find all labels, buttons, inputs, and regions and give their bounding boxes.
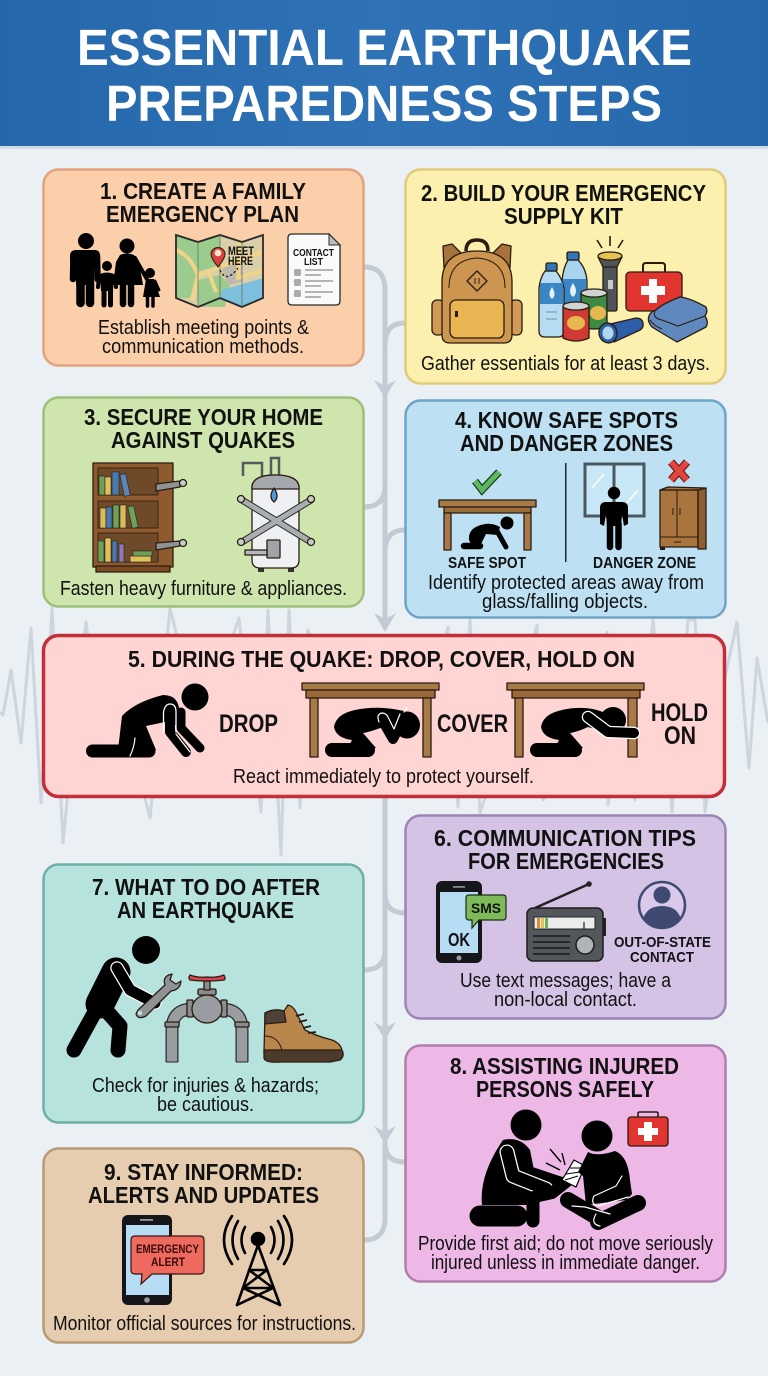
label: out-of-state contact: CONTACT	[630, 949, 694, 966]
heading 2: SUPPLY KIT	[504, 203, 623, 229]
heading 8	[450, 1053, 679, 1102]
body text 4	[428, 572, 704, 613]
icon: phone with emergency alert bubble: ALERT	[151, 1257, 185, 1269]
body text 7: be cautious.	[157, 1094, 254, 1116]
heading 8: PERSONS SAFELY	[476, 1076, 654, 1102]
heading 9: 9. STAY INFORMED:	[104, 1159, 303, 1185]
body text 8	[418, 1233, 713, 1274]
heading 8: 8. ASSISTING INJURED	[450, 1053, 679, 1079]
icon: table with person holding on	[507, 683, 644, 757]
icon: radio tower with signal waves	[224, 1216, 292, 1305]
header banner	[0, 0, 768, 149]
heading 7	[92, 874, 320, 923]
heading 2	[421, 180, 706, 229]
icon: person with wrench	[74, 936, 181, 1050]
icon: first aid kit	[628, 1112, 668, 1146]
icon: folded blanket	[648, 297, 707, 342]
flow arrowheads	[374, 380, 396, 1144]
divider	[565, 463, 566, 562]
body text 9: Monitor official sources for instructions.	[53, 1313, 356, 1335]
body text 2: Gather essentials for at least 3 days.	[421, 353, 710, 375]
label: hold on	[651, 699, 708, 750]
icon: backpack	[432, 240, 522, 343]
icon: safe spot table with check	[439, 472, 536, 550]
heading 4: 4. KNOW SAFE SPOTS	[455, 407, 678, 433]
body text 3: Fasten heavy furniture & appliances.	[60, 578, 347, 600]
heading 9	[88, 1159, 319, 1208]
icon: radio	[527, 881, 606, 961]
body text 6: Use text messages; have a	[460, 970, 672, 992]
body text 7: Check for injuries & hazards;	[92, 1075, 319, 1097]
body text 4: Identify protected areas away from	[428, 572, 704, 594]
heading 4: AND DANGER ZONES	[460, 430, 673, 456]
heading 3: AGAINST QUAKES	[111, 427, 295, 453]
body text 1: Establish meeting points &	[98, 317, 310, 339]
icon: gas shutoff valve pipe	[165, 975, 249, 1062]
heading 7: AN EARTHQUAKE	[117, 897, 294, 923]
icon: person dropping	[92, 684, 208, 756]
seismograph wave background	[0, 608, 768, 855]
heading 7: 7. WHAT TO DO AFTER	[92, 874, 320, 900]
heading 3: 3. SECURE YOUR HOME	[84, 404, 323, 430]
panel 3: secure your home	[44, 398, 364, 606]
heading 6: 6. COMMUNICATION TIPS	[434, 825, 696, 851]
panel 2: emergency supply kit	[406, 170, 726, 384]
label: out-of-state contact: OUT-OF-STATE	[614, 934, 711, 951]
icon: map with meeting pin: MEET	[228, 246, 254, 258]
icon: helper kneeling and injured person with bandaged arm	[480, 1110, 638, 1226]
icon: map with meeting pin: HERE	[228, 256, 253, 268]
icon: phone with emergency alert bubble: EMERGENCY	[136, 1244, 199, 1256]
body text 5: React immediately to protect yourself.	[233, 766, 534, 788]
heading 2: 2. BUILD YOUR EMERGENCY	[421, 180, 706, 206]
flow connector lines	[364, 267, 405, 1240]
panel 7: after an earthquake	[44, 864, 364, 1122]
heading 1	[100, 178, 306, 227]
body text 8: Provide first aid; do not move seriously	[418, 1233, 713, 1255]
icon: phone with emergency alert bubble	[122, 1215, 204, 1305]
body text 7	[92, 1075, 319, 1116]
label: drop: DROP	[219, 710, 278, 738]
icon: phone with SMS bubble: SMS	[471, 900, 501, 916]
icon: strapped bookshelf	[93, 463, 186, 572]
icon: strapped water heater	[238, 458, 314, 572]
heading 1: EMERGENCY PLAN	[106, 201, 299, 227]
body text 8: injured unless in immediate danger.	[431, 1252, 700, 1274]
title	[77, 19, 692, 132]
panel 1: family emergency plan	[44, 170, 364, 366]
heading 1: 1. CREATE A FAMILY	[100, 178, 306, 204]
panel 9: stay informed	[44, 1148, 364, 1342]
body text 6: non-local contact.	[494, 989, 637, 1011]
icon: contact list: CONTACT	[293, 247, 334, 259]
heading 6	[434, 825, 696, 874]
body text 1: communication methods.	[102, 336, 304, 358]
icon: family silhouettes	[70, 233, 160, 306]
label: safe spot: SAFE SPOT	[448, 555, 526, 572]
icon: phone with SMS bubble	[436, 881, 506, 963]
icon: work boot	[264, 1005, 343, 1062]
icon: water bottles, cans and flashlights	[539, 236, 682, 345]
heading 9: ALERTS AND UPDATES	[88, 1182, 319, 1208]
icon: phone with SMS bubble: OK	[448, 930, 470, 950]
heading 4	[455, 407, 678, 456]
panel 8: assisting injured persons	[406, 1046, 726, 1282]
panel 6: communication tips	[406, 816, 726, 1018]
heading 3	[84, 404, 323, 453]
title: PREPAREDNESS STEPS	[106, 75, 662, 132]
title: ESSENTIAL EARTHQUAKE	[77, 19, 692, 76]
heading 5: 5. DURING THE QUAKE: DROP, COVER, HOLD ON	[128, 646, 635, 672]
panel 5: drop, cover, hold on	[44, 636, 724, 796]
icon: out-of-state contact avatar	[639, 882, 685, 928]
icon: map with meeting pin	[176, 235, 263, 307]
body text 6	[460, 970, 672, 1011]
icon: contact list	[288, 234, 340, 305]
label: out-of-state contact	[614, 934, 711, 966]
label: hold on: HOLD	[651, 699, 708, 727]
label: danger zone: DANGER ZONE	[593, 555, 696, 572]
body text 1	[98, 317, 310, 358]
icon: contact list: LIST	[304, 256, 323, 268]
label: cover: COVER	[437, 710, 508, 738]
icon: danger zone window, person, wardrobe and cross	[585, 462, 706, 550]
label: hold on: ON	[664, 722, 696, 750]
icon: table with person covering head	[302, 683, 439, 757]
body text 4: glass/falling objects.	[482, 591, 648, 613]
panel 4: safe spots and danger zones	[406, 400, 726, 618]
heading 6: FOR EMERGENCIES	[468, 848, 664, 874]
